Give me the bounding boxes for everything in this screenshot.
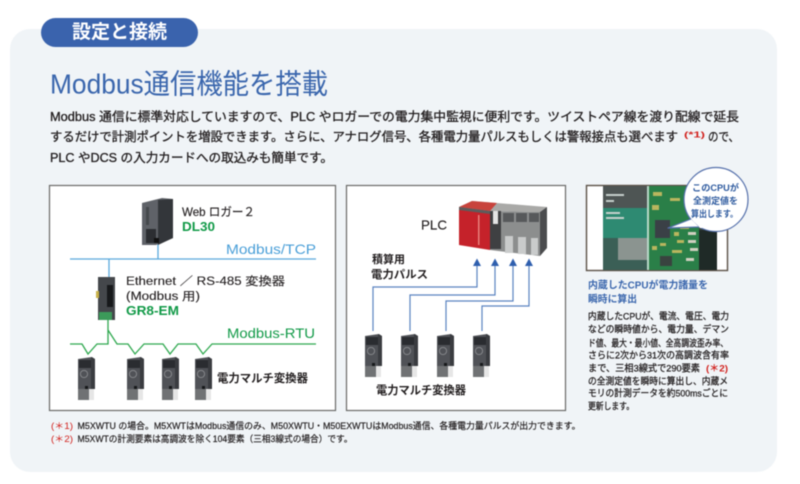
arrowheads (473, 258, 533, 266)
section tab: settings and connection (41, 18, 198, 47)
power multi-converter label: 電力マルチ変換器 (217, 371, 308, 385)
intro text block: (*1) (684, 130, 706, 140)
panel: Modbus network diagram (50, 186, 336, 410)
intro text block: するだけで計測ポイントを増設できます。さらに、アナログ信号、各種電力量パルスもしくは警報接点も選べます (50, 129, 678, 144)
pulse label: 電力パルス (371, 267, 428, 281)
side heading (588, 278, 708, 306)
footnotes (51, 420, 580, 444)
GR8-EM label: (Modbus 用) (126, 291, 200, 303)
intro text block: PLC やDCS の入力カードへの取込みも簡単です。 (50, 150, 333, 165)
intro text block: Modbus 通信に標準対応していますので、PLC やロガーでの電力集中監視に便利です。ツイストペア線を渡り配線で延長 (50, 109, 739, 124)
side description text: (＊2) (706, 364, 728, 374)
photo: internal circuit board (586, 186, 728, 270)
GR8-EM label: GR8-EM (126, 304, 179, 318)
intro text block (50, 109, 739, 165)
callout bubble: このCPUが (692, 182, 739, 193)
panel: PLC pulse diagram (346, 186, 566, 410)
title: Modbus通信機能を搭載 (50, 68, 328, 100)
callout bubble: 算出します。 (691, 208, 738, 219)
side description text: ド値、最大・最小値、全高調波歪み率、 (588, 338, 728, 350)
footnotes: M5XWTU の場合。M5XWTはModbus通信のみ、M50XWTU・M50EXWTUはModbus通信、各種電力量パルスが出力できます。 (78, 420, 580, 431)
pulse label: 積算用 (372, 252, 405, 266)
side description text: 更新します。 (588, 402, 634, 412)
Web logger label (182, 205, 255, 234)
footnotes: (＊2) (51, 434, 73, 444)
pulse wiring lines (373, 264, 529, 331)
footnotes: (＊1) (51, 421, 73, 431)
power multi-converter label: 電力マルチ変換器 (376, 383, 466, 397)
side heading: 瞬時に算出 (588, 292, 637, 306)
side description text: モリの計測データを約500msごとに (588, 388, 728, 400)
icons: power multi-converters (365, 334, 490, 377)
icons: power multi-converters (78, 357, 212, 400)
Modbus-RTU label: Modbus-RTU (227, 325, 315, 341)
intro text block: ので、 (708, 130, 739, 144)
footnotes: M5XWTの計測要素は高調波を除く104要素（三相3線式の場合）です。 (78, 433, 352, 444)
pulse label (371, 252, 428, 281)
side description text: などの瞬時値から、電力量、デマン (588, 324, 729, 336)
side description text (588, 310, 729, 412)
Modbus/TCP label: Modbus/TCP (226, 241, 316, 257)
Web logger label: DL30 (182, 220, 215, 234)
section tab: settings and connection: 設定と接続 (72, 21, 167, 43)
icon: Web logger DL30 (142, 198, 173, 245)
Modbus/TCP network line (70, 243, 316, 278)
side heading: 内蔵したCPUが電力諸量を (588, 278, 708, 292)
icon: converter GR8-EM (96, 277, 115, 320)
Web logger label: Web ロガー２ (182, 205, 255, 219)
side description text: の全測定値を瞬時に算出し、内蔵メ (588, 376, 728, 388)
side description text: さらに2次から31次の高調波含有率 (588, 350, 729, 362)
Modbus-RTU network line (70, 320, 316, 354)
callout bubble: 全測定値を (693, 195, 738, 206)
callout bubble (668, 168, 748, 232)
side description text: 内蔵したCPUが、電流、電圧、電力 (588, 310, 729, 322)
side description text: まで、三相3線式で290要素 (588, 362, 700, 374)
PLC label: PLC (421, 218, 447, 232)
icon: PLC (459, 201, 547, 256)
GR8-EM label: Ethernet ／ RS-485 変換器 (126, 275, 286, 288)
GR8-EM label (126, 275, 286, 318)
